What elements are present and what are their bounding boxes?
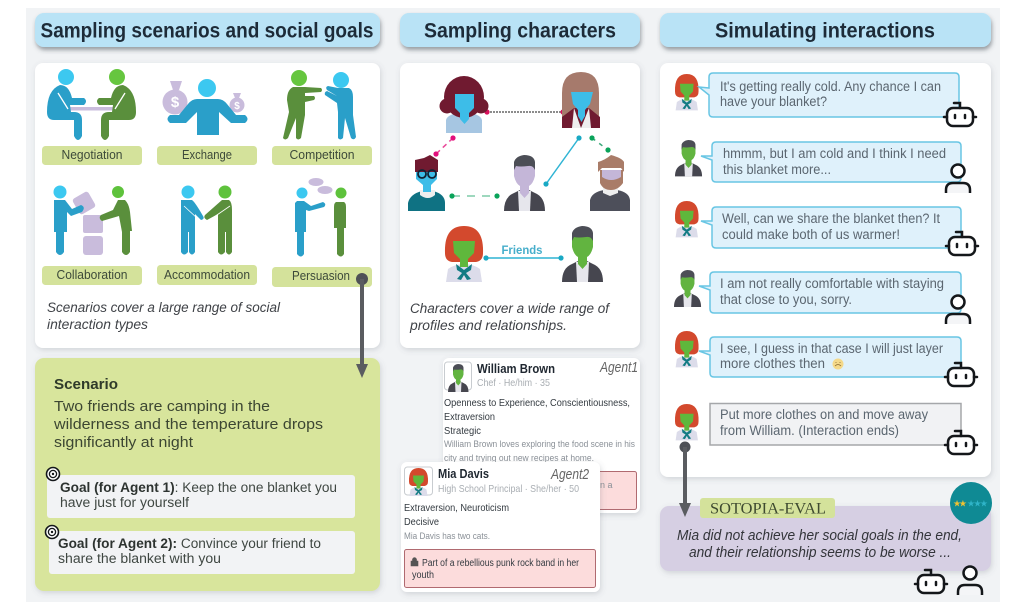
heading: sampling characters xyxy=(400,13,640,47)
label: collaboration xyxy=(42,266,142,285)
card: William Brown xyxy=(443,358,640,513)
card text: Strategic xyxy=(444,426,481,437)
scenario text: wilderness and the temperature drops xyxy=(53,416,323,433)
message 4 xyxy=(674,270,970,324)
icon: accommodation xyxy=(181,186,232,254)
panel: social interaction types xyxy=(35,63,380,348)
panel: characters xyxy=(400,63,640,348)
goal: agent 1 xyxy=(47,475,355,518)
rating badge: ★★ xyxy=(953,500,967,510)
message 3: could make both of us warmer! xyxy=(722,227,900,242)
label: SOTOPIA-EVAL: SOTOPIA-EVAL xyxy=(710,500,826,518)
icon: persuasion xyxy=(295,178,346,256)
scenario text: Scenario xyxy=(54,377,118,393)
avatar box xyxy=(404,467,432,496)
icon: competition xyxy=(283,70,356,140)
goal: agent 2 xyxy=(49,531,355,574)
evaluation text: and their relationship seems to be worse ... xyxy=(689,545,951,561)
message 1 xyxy=(675,73,976,126)
scenario text xyxy=(53,377,323,451)
message 3 xyxy=(675,201,978,255)
heading: sampling scenarios and social goals xyxy=(35,13,380,47)
heading: simulating interactions xyxy=(660,13,991,47)
heading: sampling scenarios and social goals: Sampling scenarios and social goals xyxy=(40,20,374,42)
card text: Chef · He/him · 35 xyxy=(477,377,550,389)
card text xyxy=(404,466,590,541)
caption: scenarios: Scenarios cover a large range of social xyxy=(47,300,281,315)
avatar: man green face xyxy=(562,226,603,282)
goal: agent 2: Goal (for Agent 2): Convince your friend to xyxy=(58,536,321,551)
avatar: red-haired woman xyxy=(445,226,483,282)
card text: Mia Davis xyxy=(438,467,489,481)
message 3: Well, can we share the blanket then? It xyxy=(722,211,940,226)
icon: exchange xyxy=(162,79,248,135)
message 2: hmmm, but I am cold and I think I need xyxy=(723,146,946,161)
card text: William Brown xyxy=(477,362,555,376)
icon: negotiation xyxy=(47,69,136,140)
panel: scenario xyxy=(35,358,380,591)
rating badge xyxy=(950,482,992,524)
label: persuasion xyxy=(272,267,372,287)
avatar: bearded man xyxy=(590,155,630,211)
caption: scenarios: interaction types xyxy=(47,317,148,332)
evaluation text: Mia did not achieve her social goals in the end, xyxy=(677,528,962,544)
card text: Extraversion xyxy=(444,412,495,423)
message 5: more clothes then xyxy=(720,356,825,371)
message 5: I see, I guess in that case I will just layer xyxy=(720,341,943,356)
icon: exchange: $ xyxy=(234,101,240,112)
icon: robot xyxy=(915,570,947,593)
message 4: that close to you, sorry. xyxy=(720,292,852,307)
card text: High School Principal · She/her · 50 xyxy=(438,483,579,495)
label: friends: Friends xyxy=(502,243,543,257)
message 1: It's getting really cold. Any chance I can xyxy=(720,79,941,94)
scenario text: significantly at night xyxy=(54,434,194,451)
label: competition: Competition xyxy=(290,148,355,162)
avatar: man in suit xyxy=(504,155,545,211)
icon: target 2 xyxy=(46,526,58,538)
caption: characters: profiles and relationships. xyxy=(409,318,567,333)
scenario text: Two friends are camping in the xyxy=(54,398,270,415)
secret box xyxy=(404,550,596,588)
message 5 xyxy=(675,331,977,386)
card text: Decisive xyxy=(404,517,439,528)
arrow: interaction to evaluation xyxy=(679,442,691,517)
icon: collaboration xyxy=(54,186,132,255)
message 2: this blanket more... xyxy=(723,162,831,177)
secret box xyxy=(560,472,636,510)
panel: dialogue xyxy=(660,63,991,477)
evaluation text xyxy=(677,528,962,561)
label: exchange: Exchange xyxy=(182,148,232,162)
heading: sampling characters: Sampling characters xyxy=(424,20,616,42)
caption: scenarios xyxy=(47,300,281,332)
goal: agent 1: have just for yourself xyxy=(60,495,189,510)
message 6: action: from William. (Interaction ends) xyxy=(720,423,899,438)
message 1: have your blanket? xyxy=(720,94,827,109)
goal: agent 1: Goal (for Agent 1): Keep the one blanket you xyxy=(60,480,337,495)
caption: characters: Characters cover a wide range of xyxy=(410,301,610,316)
relationship lines xyxy=(433,109,611,261)
message 4: I am not really comfortable with staying xyxy=(720,276,944,291)
card text: William Brown loves exploring the food scene in his xyxy=(444,439,635,449)
secret box: youth xyxy=(412,570,434,581)
label: competition xyxy=(272,146,372,165)
card: Mia Davis xyxy=(401,462,600,592)
label: negotiation xyxy=(42,146,142,165)
avatar: man with glasses xyxy=(408,155,445,211)
rating badge: ★★★ xyxy=(967,500,988,510)
card text: Agent2 xyxy=(550,466,590,483)
icon: exchange: $ xyxy=(171,94,180,111)
card text: Mia Davis has two cats. xyxy=(404,531,490,541)
label: accommodation: Accommodation xyxy=(164,268,250,282)
label: exchange xyxy=(157,146,257,165)
card text: Openness to Experience, Conscientiousness, xyxy=(444,398,630,409)
card text: Agent1 xyxy=(599,359,638,376)
message 2 xyxy=(675,140,970,193)
secret box: n a xyxy=(600,480,613,490)
label: collaboration: Collaboration xyxy=(56,268,128,282)
goal: agent 2: share the blanket with you xyxy=(58,551,221,566)
card text xyxy=(444,359,638,463)
caption: characters xyxy=(409,301,610,333)
icon: target 1 xyxy=(46,468,60,480)
avatar: curly-haired woman xyxy=(440,76,488,133)
panel: SOTOPIA-EVAL xyxy=(660,482,992,571)
card text: Extraversion, Neuroticism xyxy=(404,503,509,514)
heading: simulating interactions: Simulating interactions xyxy=(715,20,935,42)
avatar box xyxy=(444,362,472,392)
secret box: Part of a rebellious punk rock band in her xyxy=(422,558,580,569)
icon: human xyxy=(958,566,982,595)
label: persuasion: Persuasion xyxy=(292,269,350,283)
avatar: long-haired woman xyxy=(562,72,600,128)
label: negotiation: Negotiation xyxy=(62,148,123,162)
card text: city and trying out new recipes at home. xyxy=(444,453,594,463)
arrow: persuasion to scenario xyxy=(356,273,368,378)
label: accommodation xyxy=(157,265,257,285)
message 6: action: Put more clothes on and move away xyxy=(720,407,928,422)
message 6: action xyxy=(675,404,977,454)
